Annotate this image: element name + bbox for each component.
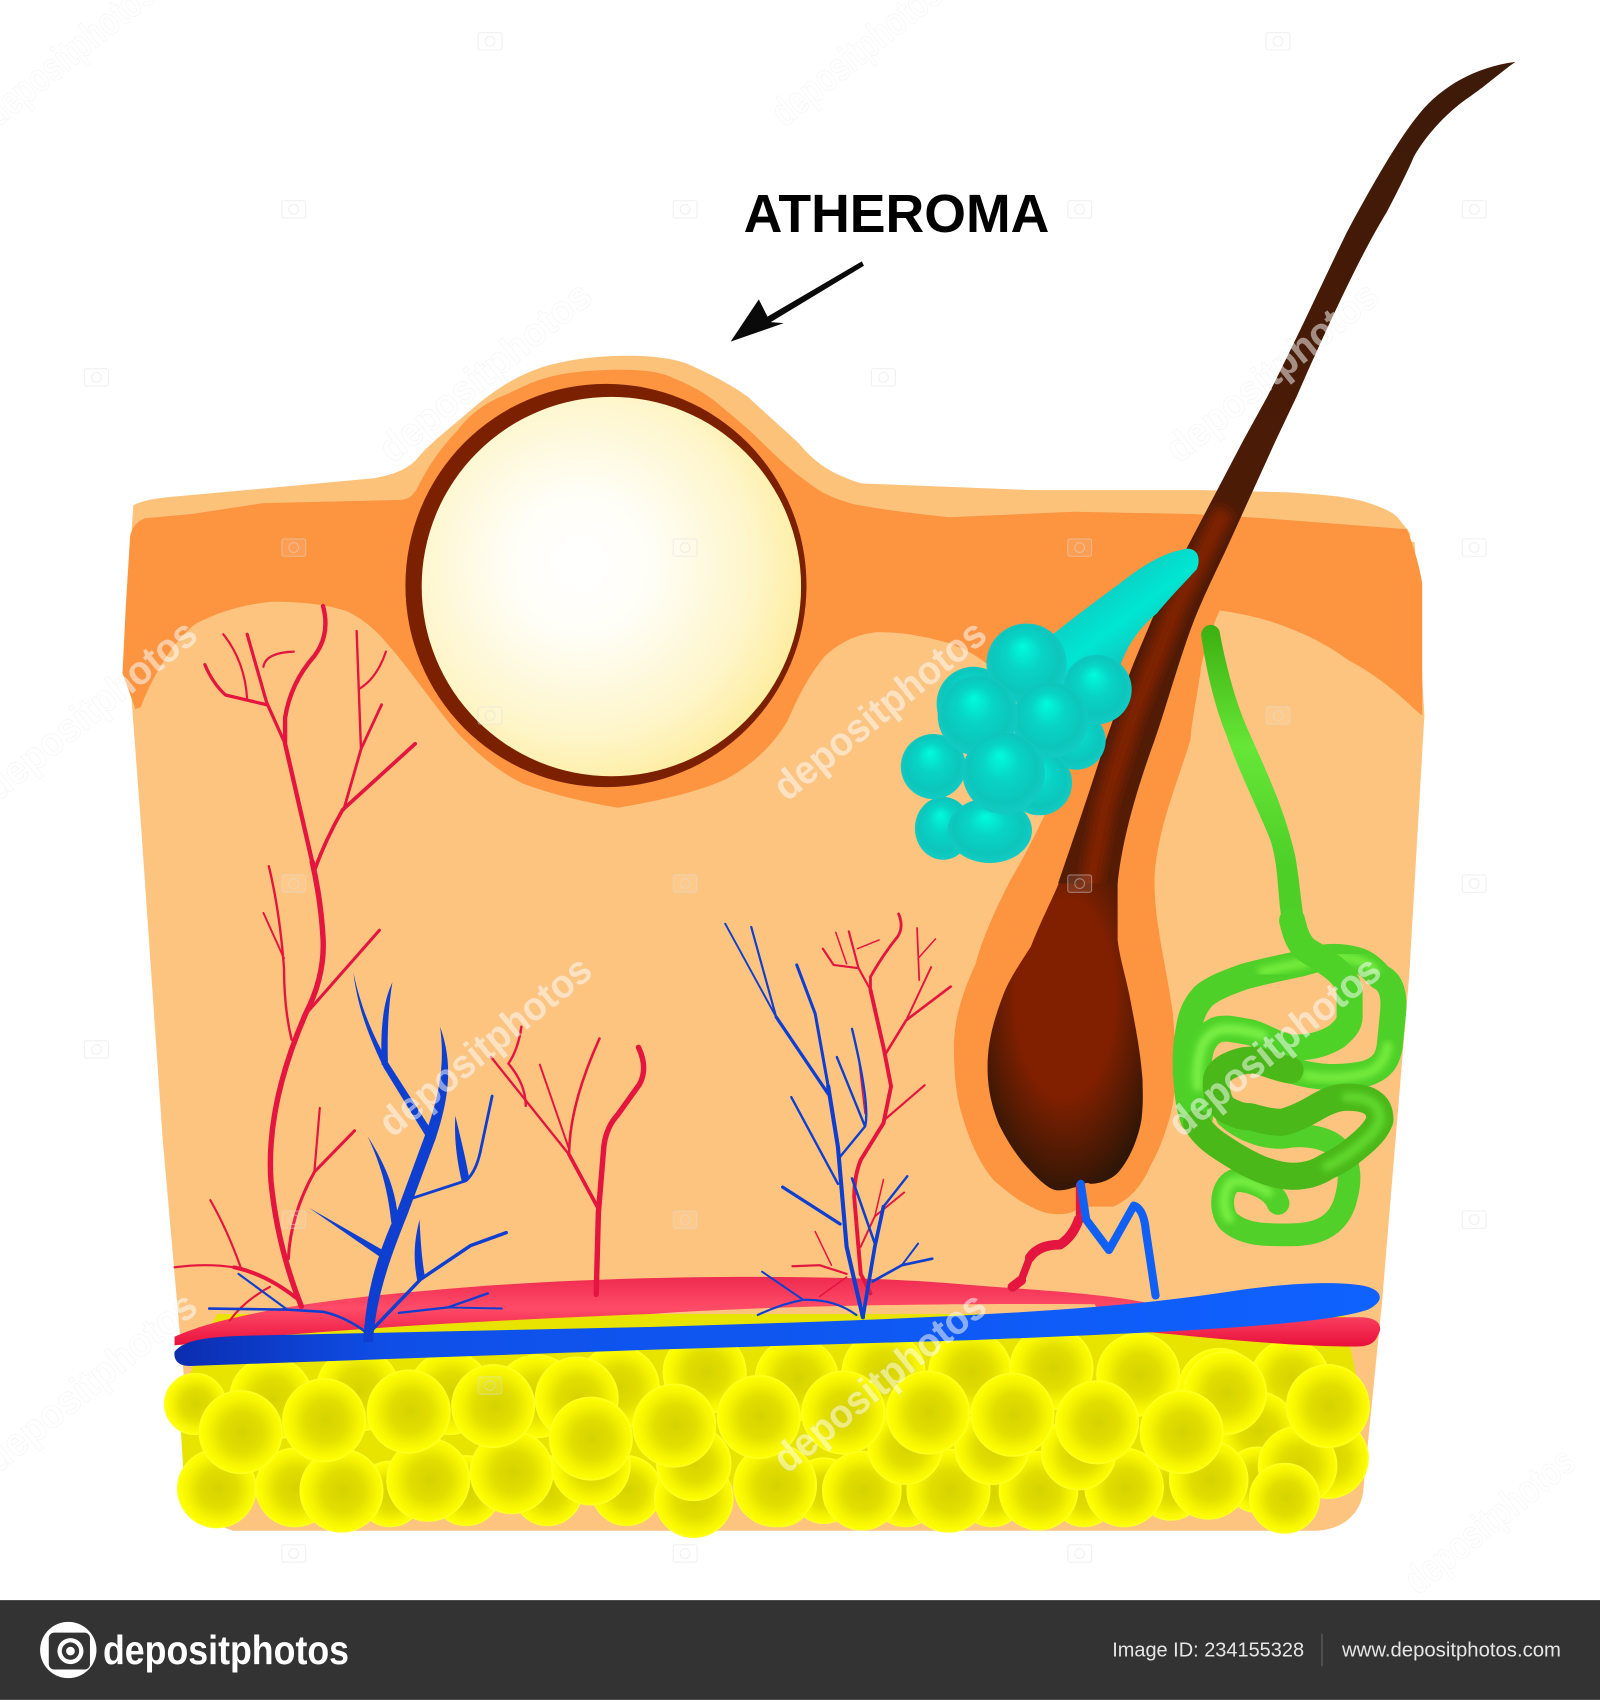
sweat gland — [1185, 625, 1393, 1235]
vein — [174, 1283, 1380, 1366]
hair bulb artery — [1012, 1185, 1079, 1287]
watermark stamps: depositphotos — [1160, 947, 1389, 1145]
epidermis outer band — [130, 356, 1410, 553]
hair bulb — [988, 880, 1143, 1190]
front dark coil — [1197, 1060, 1380, 1176]
footer bar — [0, 1600, 1600, 1700]
watermark stamps: depositphotos — [370, 273, 600, 471]
epidermis inner layer — [122, 370, 1422, 808]
watermark stamps: depositphotos — [765, 1283, 995, 1481]
red capillaries: left tree — [175, 606, 415, 1320]
website url: www.depositphotos.com — [1341, 1639, 1561, 1662]
atheroma cyst content — [422, 397, 801, 776]
hair bulb vein — [1081, 1184, 1156, 1296]
arrow pointing to the atheroma — [731, 261, 864, 342]
outer coil — [1185, 957, 1393, 1120]
panel: skin cross-section — [122, 356, 1424, 1531]
title: ATHEROMA — [744, 184, 1049, 244]
artery — [175, 1277, 1380, 1346]
watermark stamps: depositphotos — [1157, 273, 1387, 471]
sebaceous gland — [901, 549, 1199, 863]
fat layer — [165, 1314, 1369, 1537]
gland duct — [1051, 549, 1199, 694]
red capillaries: middle tree — [491, 1027, 644, 1294]
duct tube — [1201, 625, 1304, 924]
hair follicle sheath — [954, 586, 1220, 1214]
dermis layer — [128, 510, 1424, 1531]
watermark stamps: depositphotos — [370, 947, 600, 1145]
hair shaft — [1041, 54, 1528, 900]
gland lobules — [901, 623, 1132, 863]
lower coil — [1223, 1117, 1349, 1235]
red capillaries: right tree — [792, 914, 951, 1297]
icon: depositphotos camera logo — [40, 1622, 96, 1678]
footer logo wordmark: depositphotos — [103, 1627, 349, 1673]
blue capillaries: left tree — [209, 972, 506, 1342]
inner coil — [1197, 920, 1350, 1117]
atheroma cyst wall — [405, 384, 807, 787]
watermark stamps: depositphotos — [765, 611, 995, 809]
image id: Image ID: 234155328 — [1112, 1639, 1304, 1662]
blue capillaries: right tree — [725, 924, 932, 1317]
